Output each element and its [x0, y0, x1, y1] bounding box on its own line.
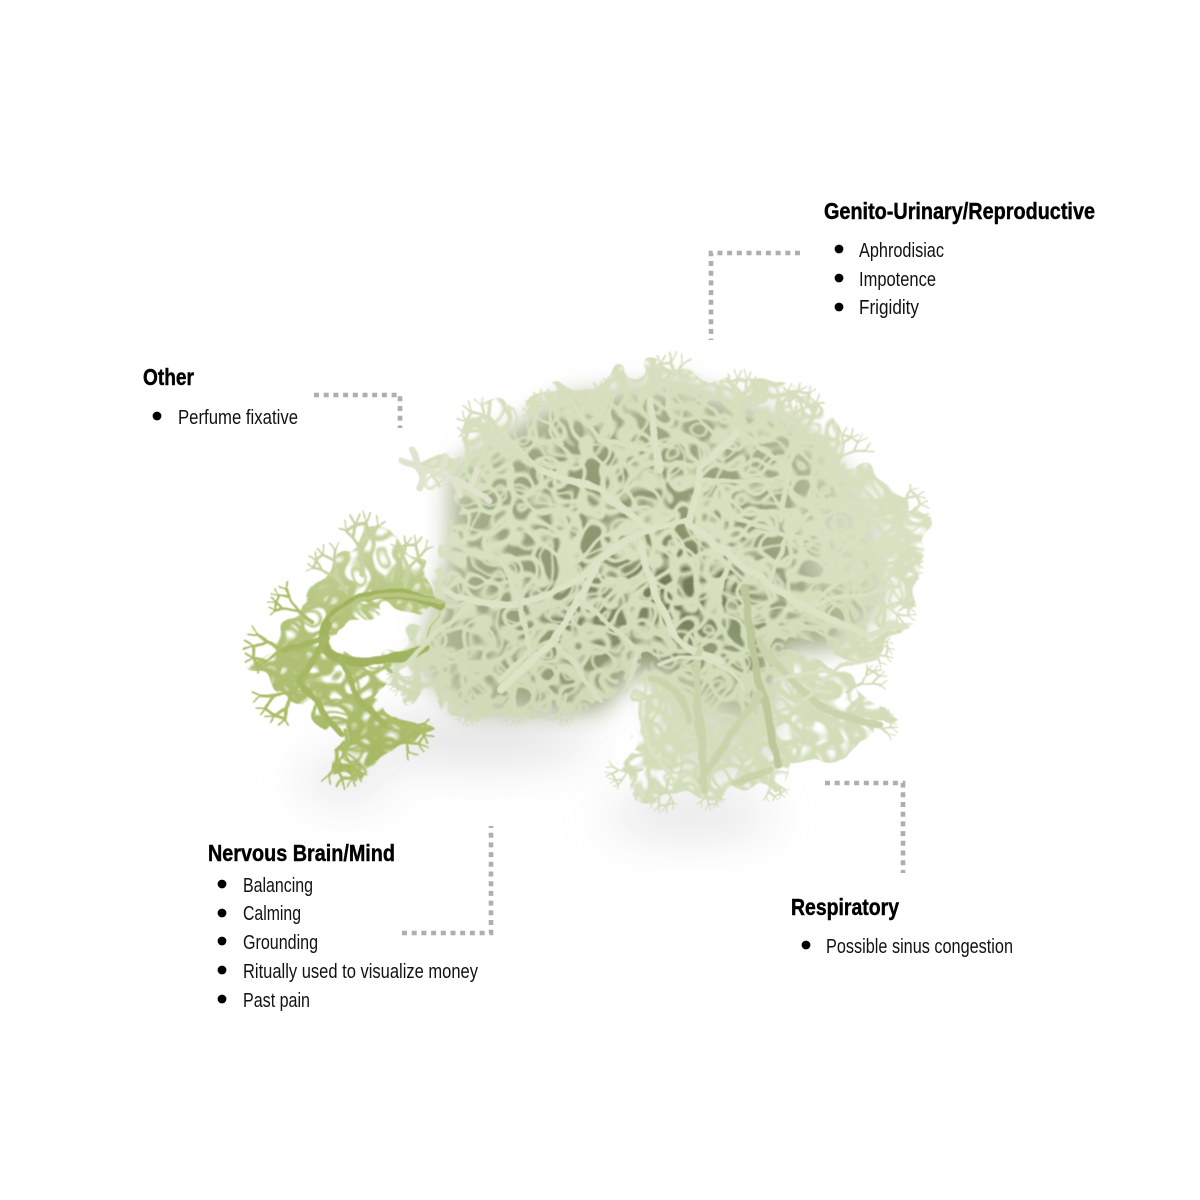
soft drop shadows	[300, 712, 775, 835]
panel: genito-urinary/reproductive	[824, 198, 1095, 319]
list: genito-urinary items: Frigidity	[859, 297, 919, 319]
heading: other: Other	[143, 364, 194, 390]
list: nervous items: Calming	[243, 903, 301, 925]
lower right dim backing	[650, 650, 790, 780]
pale spray on the upper left	[402, 450, 490, 500]
shaded core behind the branches	[415, 385, 885, 715]
list: nervous items: Balancing	[243, 875, 313, 897]
panel: respiratory	[791, 894, 1013, 958]
panel: nervous brain/mind	[208, 840, 478, 1012]
list: nervous items: Past pain	[243, 990, 310, 1012]
connector: nervous brain/mind	[402, 826, 491, 933]
upper fringe branches	[447, 351, 935, 672]
heading: genito-urinary/reproductive: Genito-Urinary/Reproductive	[824, 198, 1095, 224]
list: respiratory items: Possible sinus congestion	[826, 936, 1013, 958]
heading: respiratory: Respiratory	[791, 894, 899, 920]
list: nervous items: Ritually used to visualize money	[243, 961, 478, 983]
connector: other	[314, 395, 400, 428]
main branch network	[375, 362, 925, 718]
central thick branches	[395, 400, 905, 700]
list: genito-urinary items: Impotence	[859, 269, 936, 291]
panel: other	[143, 364, 298, 429]
deep shadows and pale pockets	[520, 442, 874, 705]
connector: respiratory	[825, 783, 903, 873]
bottom fringe branches	[383, 657, 578, 728]
list: nervous items: Grounding	[243, 932, 318, 954]
connector: genito-urinary	[711, 253, 800, 340]
left branch limbs and tips	[243, 513, 442, 789]
list: nervous items	[218, 875, 478, 1012]
left green branch network	[250, 525, 435, 780]
lichen illustration	[243, 351, 935, 835]
heading: nervous brain/mind: Nervous Brain/Mind	[208, 840, 395, 866]
lower right branches	[603, 658, 900, 816]
list: genito-urinary items: Aphrodisiac	[859, 240, 944, 262]
list: genito-urinary items	[835, 240, 944, 319]
lower right branch network	[615, 640, 890, 800]
list: other items: Perfume fixative	[178, 407, 298, 429]
